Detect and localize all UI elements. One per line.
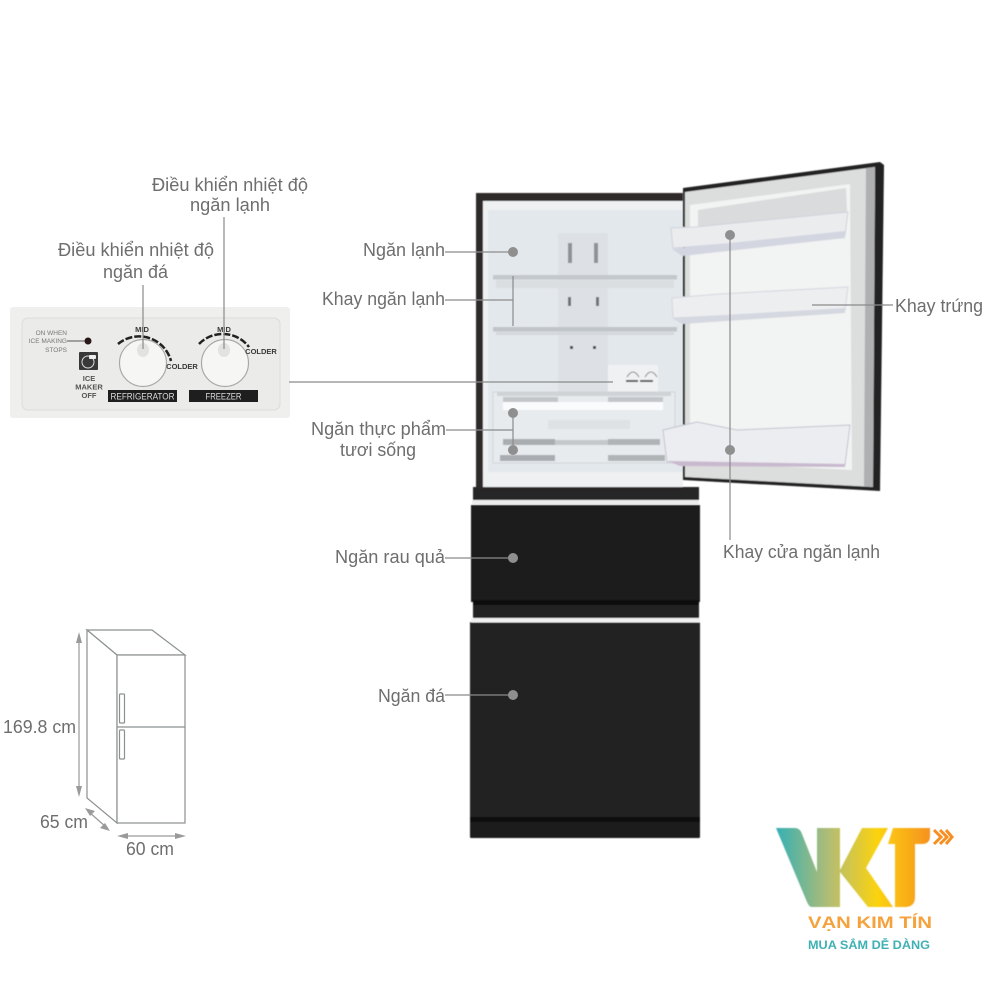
indicator label: ON WHEN	[36, 330, 67, 337]
indicator label: ICE MAKING	[29, 338, 67, 345]
ice maker icon	[79, 352, 98, 370]
indicator label: STOPS	[45, 347, 68, 354]
callout: leader lines	[143, 217, 893, 700]
label: freezer temperature control: Điều khiển nhiệt độ	[152, 174, 308, 195]
dimension arrows	[76, 632, 186, 839]
ice maker off label: OFF	[82, 391, 97, 400]
dimension diagram	[3, 630, 186, 859]
refrigerator dial	[118, 325, 198, 386]
open fridge compartment	[476, 193, 683, 489]
logo name: VẠN KIM TÍN	[808, 913, 932, 932]
depth label: 65 cm	[40, 811, 88, 832]
label: cold compartment shelf: Khay ngăn lạnh	[322, 288, 445, 309]
label: freezer temperature control: ngăn lạnh	[190, 194, 270, 215]
refrigerator dial: COLDER	[166, 362, 198, 371]
fridge outline icon	[87, 630, 185, 823]
label: door tray: Khay cửa ngăn lạnh	[723, 541, 880, 562]
refrigerator dial: MID	[135, 325, 149, 334]
logo	[776, 828, 952, 952]
label: cold compartment: Ngăn lạnh	[363, 239, 445, 260]
freezer dial	[199, 325, 277, 386]
freezer tag	[189, 390, 258, 402]
freezer tag: FREEZER	[206, 392, 242, 402]
logo arrows	[934, 830, 952, 844]
logo mark VKT	[776, 828, 930, 907]
label: fresh food compartment: Ngăn thực phẩm	[311, 418, 446, 439]
open fridge door	[663, 162, 884, 491]
indicator light	[67, 338, 92, 344]
label: fresh food compartment: tươi sống	[340, 439, 416, 460]
label: refrigerator temperature control: ngăn đá	[103, 261, 169, 282]
ice maker off label: MAKER	[75, 382, 103, 392]
height label: 169.8 cm	[3, 716, 76, 737]
freezer dial: MID	[217, 325, 231, 334]
control panel	[10, 307, 290, 418]
fridge illustration	[470, 162, 884, 838]
freezer dial: COLDER	[245, 347, 277, 356]
logo tagline: MUA SẮM DỄ DÀNG	[808, 939, 930, 952]
label: freezer drawer: Ngăn đá	[378, 685, 446, 706]
label: vegetable drawer: Ngăn rau quả	[335, 546, 446, 567]
lower fridge drawers	[470, 487, 700, 838]
label: egg tray: Khay trứng	[895, 295, 983, 316]
width label: 60 cm	[126, 838, 174, 859]
label: refrigerator temperature control: Điều khiển nhiệt độ	[58, 239, 214, 260]
refrigerator tag: REFRIGERATOR	[110, 392, 175, 402]
ice maker off label: ICE	[83, 374, 95, 383]
